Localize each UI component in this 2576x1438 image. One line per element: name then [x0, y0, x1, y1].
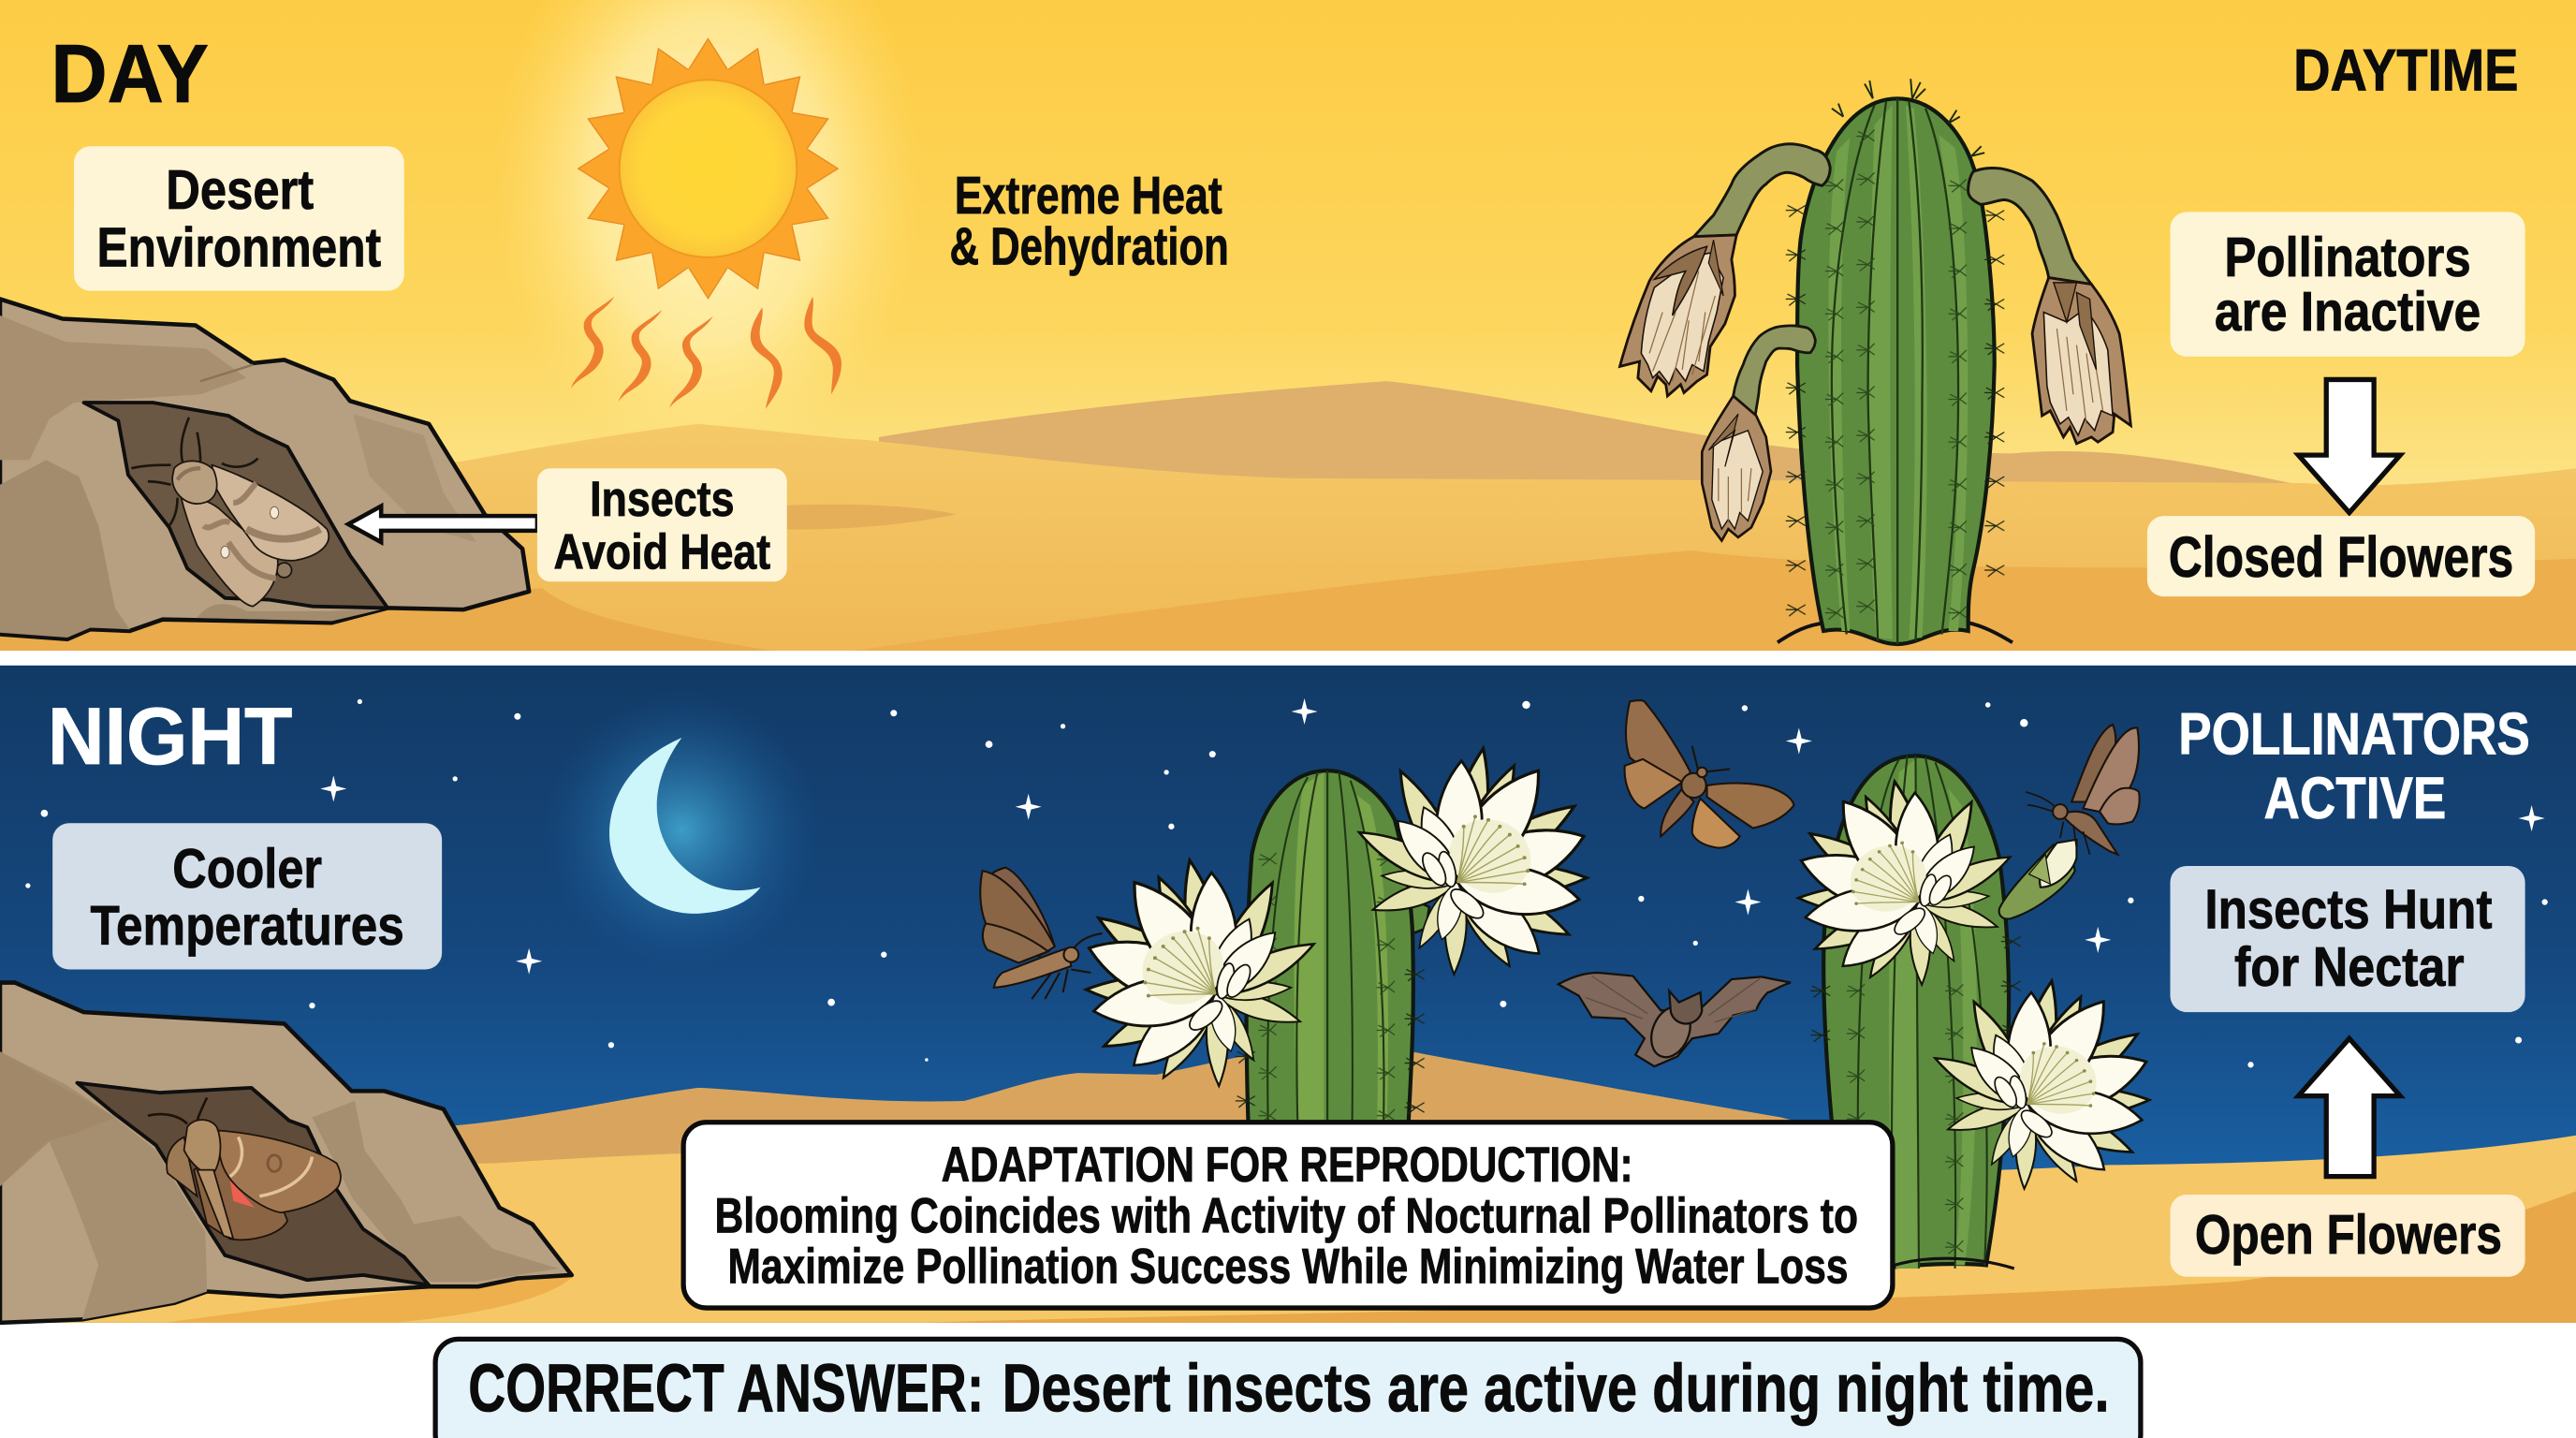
day rock with cave [0, 299, 529, 639]
rock shading [0, 1051, 207, 1319]
moon [542, 690, 822, 970]
arrow: down to closed flowers [2298, 379, 2400, 513]
day panel [0, 0, 2576, 651]
night sky [0, 666, 2576, 1323]
rock crack [200, 365, 253, 381]
callout: adaptation for reproduction: Maximize Pollination Success While Minimizing Water Loss [728, 1240, 1848, 1295]
heading: POLLINATORS ACTIVE: ACTIVE [2264, 766, 2446, 831]
moth near right flower [2026, 725, 2140, 855]
left wing band [204, 521, 276, 579]
thorax [172, 461, 217, 504]
heading: NIGHT: NIGHT [48, 692, 292, 782]
ground mound [1778, 623, 2012, 642]
lighter rib stripes [1869, 105, 1893, 639]
foreground sand bands [855, 550, 2576, 651]
spine tufts [1232, 838, 1427, 1127]
left wing sliver [167, 1137, 198, 1196]
rib lines [1267, 770, 1383, 1134]
rib lines [1832, 98, 1958, 644]
back dunes [879, 381, 2306, 526]
left hind wing [1625, 759, 1682, 809]
callout: Open Flowers: Open Flowers [2195, 1203, 2502, 1266]
spine tufts [1808, 920, 2024, 1258]
right fore wing [1707, 783, 1794, 829]
label: Extreme Heat & Dehydration: Extreme Heat [955, 166, 1222, 225]
left fore wing [1626, 700, 1690, 782]
night flower 4 [1929, 978, 2155, 1189]
heading: DAY: DAY [51, 28, 209, 120]
sun disc [607, 67, 809, 270]
lower dried flower [1702, 396, 1771, 540]
antennae and legs [1032, 933, 1103, 999]
left dried flower [1620, 235, 1736, 396]
callout: Desert Environment: Environment [97, 215, 381, 278]
right dried flower [2032, 278, 2130, 444]
heading: DAYTIME: DAYTIME [2293, 38, 2519, 104]
wing struts [1586, 976, 1761, 1022]
head with ears [1669, 990, 1702, 1023]
cave opening [77, 1083, 429, 1284]
head [1063, 947, 1078, 962]
callout: adaptation for reproduction: Blooming Coincides with Activity of Nocturnal Pollinators to [714, 1188, 1858, 1243]
label: Extreme Heat & Dehydration: & Dehydration [949, 217, 1229, 276]
right wing [212, 465, 329, 561]
rib lines [1858, 756, 1987, 1269]
callout: Cooler Temperatures: Cooler [172, 837, 322, 900]
callout: Insects Avoid Heat [537, 468, 787, 581]
left drooping arm [1694, 144, 1830, 237]
trunk [1797, 98, 1995, 644]
callout: adaptation for reproduction [683, 1123, 1893, 1308]
near fore wing [2083, 727, 2139, 812]
back dunes, night [455, 1051, 2110, 1199]
callout: Cooler Temperatures: Temperatures [91, 894, 404, 957]
antennae and legs [131, 418, 258, 526]
label: Extreme Heat & Dehydration [949, 166, 1229, 276]
right hind wing [1692, 799, 1740, 848]
antennae [2026, 792, 2056, 812]
front right sand band [920, 1191, 2576, 1323]
lighter rib stripes [1295, 772, 1325, 1134]
night rock with cave [0, 983, 572, 1323]
callout: Insects Hunt for Nectar: for Nectar [2234, 935, 2465, 998]
moth top centre [1625, 700, 1794, 848]
hind wing with red patch [194, 1151, 287, 1240]
bat [1559, 973, 1791, 1066]
callout: Closed Flowers [2147, 516, 2535, 596]
sun glow [494, 0, 922, 477]
front sand, night [0, 1136, 2576, 1323]
callout: Pollinators are Inactive [2170, 212, 2525, 357]
night panel [0, 666, 2576, 1323]
wilted cactus, day [1620, 79, 2130, 644]
fore wing [980, 871, 1055, 953]
spine tufts [1782, 115, 2011, 634]
daytime sky [0, 0, 2576, 651]
abdomen [2062, 812, 2117, 855]
correct answer banner: Desert insects are active during night time. [1003, 1352, 2110, 1427]
lower drooping arm [1734, 326, 1815, 415]
moon glow [542, 690, 822, 970]
fore wing [218, 1131, 341, 1212]
wings [1559, 973, 1791, 1066]
callout: Insects Avoid Heat: Insects [590, 472, 735, 527]
callout: Insects Avoid Heat: Avoid Heat [553, 524, 770, 580]
heat waves [571, 297, 842, 409]
callout: Open Flowers [2170, 1195, 2525, 1277]
sun [578, 38, 838, 299]
abdomen strip [198, 1170, 233, 1239]
abdomen tip [277, 563, 292, 578]
trunk [1247, 770, 1413, 1134]
body [1681, 773, 1706, 798]
arrow: to cave [348, 506, 537, 542]
callout: Insects Hunt for Nectar: Insects Hunt [2204, 878, 2493, 941]
middle sand dune [0, 424, 2576, 651]
cave opening [84, 403, 388, 608]
callout: Desert Environment [74, 146, 404, 291]
night flower 2 [1354, 745, 1592, 975]
fore wing back [983, 868, 1055, 956]
dark sand lower left [165, 1275, 575, 1323]
body [184, 1120, 221, 1174]
legs [2060, 822, 2089, 855]
top spines [1832, 79, 1984, 156]
far wing [2071, 725, 2115, 801]
moth near left flower [980, 868, 1103, 999]
heading: POLLINATORS ACTIVE [2178, 702, 2530, 831]
antennae [148, 1097, 207, 1123]
lighter rib stripes [1889, 759, 1919, 1269]
night flower 3 [1793, 779, 2015, 985]
arrow: up to insects hunt [2298, 1038, 2400, 1177]
ground mound [1889, 1258, 2014, 1269]
left wing [181, 496, 278, 607]
callout: Desert Environment: Desert [166, 158, 314, 221]
callout: adaptation for reproduction: ADAPTATION FOR REPRODUCTION: [942, 1137, 1633, 1193]
lower left wing [1661, 788, 1694, 836]
sun rays [578, 38, 838, 299]
head [2053, 804, 2068, 819]
crescent [609, 738, 761, 914]
correct answer banner: CORRECT ANSWER: [468, 1352, 984, 1427]
dune shadow streak [772, 505, 956, 529]
hind wing [2100, 788, 2140, 824]
rock shading [0, 315, 246, 460]
right wing band [246, 529, 320, 539]
rock body [0, 983, 572, 1323]
correct answer banner [435, 1339, 2141, 1438]
callout: Pollinators are Inactive: are Inactive [2215, 280, 2481, 343]
trunk [1823, 756, 2009, 1273]
wing bands [230, 1137, 312, 1196]
rock body [0, 299, 529, 639]
right drooping arm [1969, 168, 2091, 285]
wing spots [271, 506, 279, 519]
resting moth, day [131, 418, 329, 607]
sand under rock [0, 588, 772, 651]
body [1645, 1001, 1697, 1063]
night cactus, left [1232, 770, 1429, 1134]
callout: Insects Hunt for Nectar [2170, 866, 2525, 1012]
night flower 1 [1080, 858, 1320, 1086]
callout: Pollinators are Inactive: Pollinators [2224, 226, 2471, 288]
resting moth, night [148, 1097, 341, 1240]
small arm behind flower [1405, 896, 1429, 936]
sparkle stars [320, 698, 2545, 975]
flower bud [1999, 840, 2076, 919]
abdomen [994, 948, 1071, 988]
antennae [1692, 746, 1730, 772]
night cactus, right [1808, 756, 2024, 1273]
small stars [25, 699, 2548, 1067]
callout: Cooler Temperatures [52, 823, 442, 970]
hind wing [983, 923, 1048, 962]
